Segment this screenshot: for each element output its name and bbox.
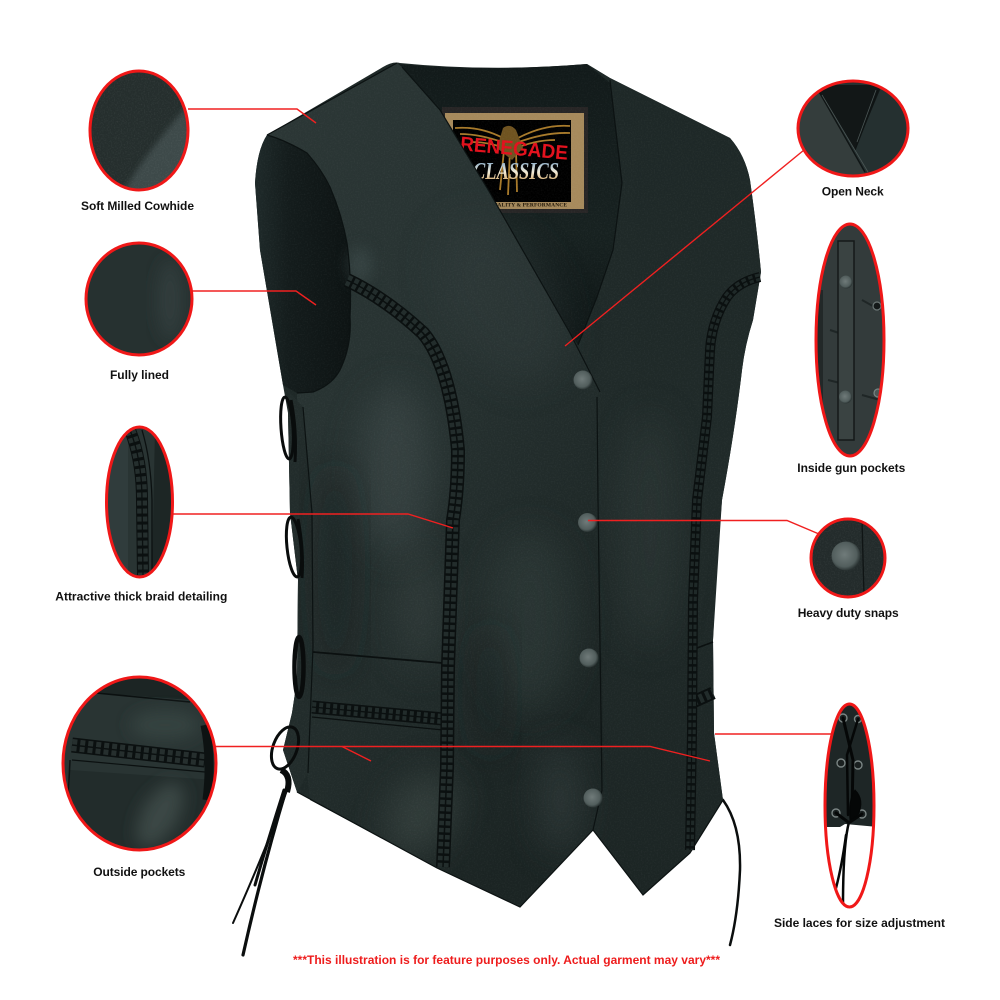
- disclaimer footnote: ***This illustration is for feature purposes only. Actual garment may vary***: [293, 953, 720, 967]
- seams and edges: [267, 63, 723, 907]
- brand neck label: [442, 107, 588, 213]
- label: side laces: Side laces for size adjustment: [774, 916, 945, 930]
- label: soft milled cowhide: Soft Milled Cowhide: [81, 199, 194, 213]
- detail circle: inside gun pockets: [812, 220, 888, 460]
- logo text: Classics: CLASSICS: [473, 159, 559, 185]
- callout line: braid detailing: [173, 514, 453, 528]
- detail circle: fully lined: [84, 242, 194, 356]
- label: fully lined: Fully lined: [110, 368, 169, 382]
- left vertical braid: [347, 280, 458, 867]
- callout line: fully lined: [192, 291, 316, 305]
- side lacing panel: [283, 393, 313, 792]
- logo text: tagline: QUALITY & PERFORMANCE: [489, 202, 567, 208]
- vest: [250, 55, 770, 915]
- label: outside pockets: Outside pockets: [93, 865, 186, 879]
- right front panel: [578, 64, 761, 895]
- label: braid detailing: Attractive thick braid detailing: [55, 590, 227, 604]
- right vertical braid: [690, 277, 760, 850]
- eagle: [455, 126, 570, 195]
- detail circle: heavy duty snaps: [808, 516, 888, 600]
- left front panel: [267, 63, 604, 907]
- left pocket: [312, 652, 443, 730]
- detail circle: soft milled cowhide: [88, 70, 190, 192]
- label: open neck: Open Neck: [822, 184, 884, 198]
- neck opening lining: [398, 64, 622, 345]
- label: heavy duty snaps: Heavy duty snaps: [798, 606, 899, 620]
- label: inside gun pockets: Inside gun pockets: [797, 461, 906, 475]
- right pocket: [693, 642, 713, 702]
- side lace loops: [266, 397, 304, 792]
- horizontal pocket braid: [312, 707, 443, 719]
- right lace: [723, 800, 740, 945]
- vest silhouette: [255, 62, 761, 907]
- left lace tassels: [233, 790, 287, 955]
- detail circle: open neck: [790, 78, 911, 178]
- callout line: soft milled cowhide: [188, 109, 316, 123]
- callout line: open neck: [565, 150, 804, 346]
- callout line: outside pockets: [215, 746, 710, 761]
- detail circle: side laces: [822, 700, 878, 910]
- detail circle: outside pockets: [60, 670, 220, 855]
- leather shading: [258, 67, 735, 878]
- detail circle: braid detailing: [105, 426, 174, 578]
- callout line: snaps: [588, 520, 819, 534]
- callout line: side laces: [715, 733, 832, 735]
- front snaps: [574, 370, 602, 808]
- logo text: Renegade: RENEGADE: [459, 133, 569, 165]
- armhole lining: [255, 135, 351, 393]
